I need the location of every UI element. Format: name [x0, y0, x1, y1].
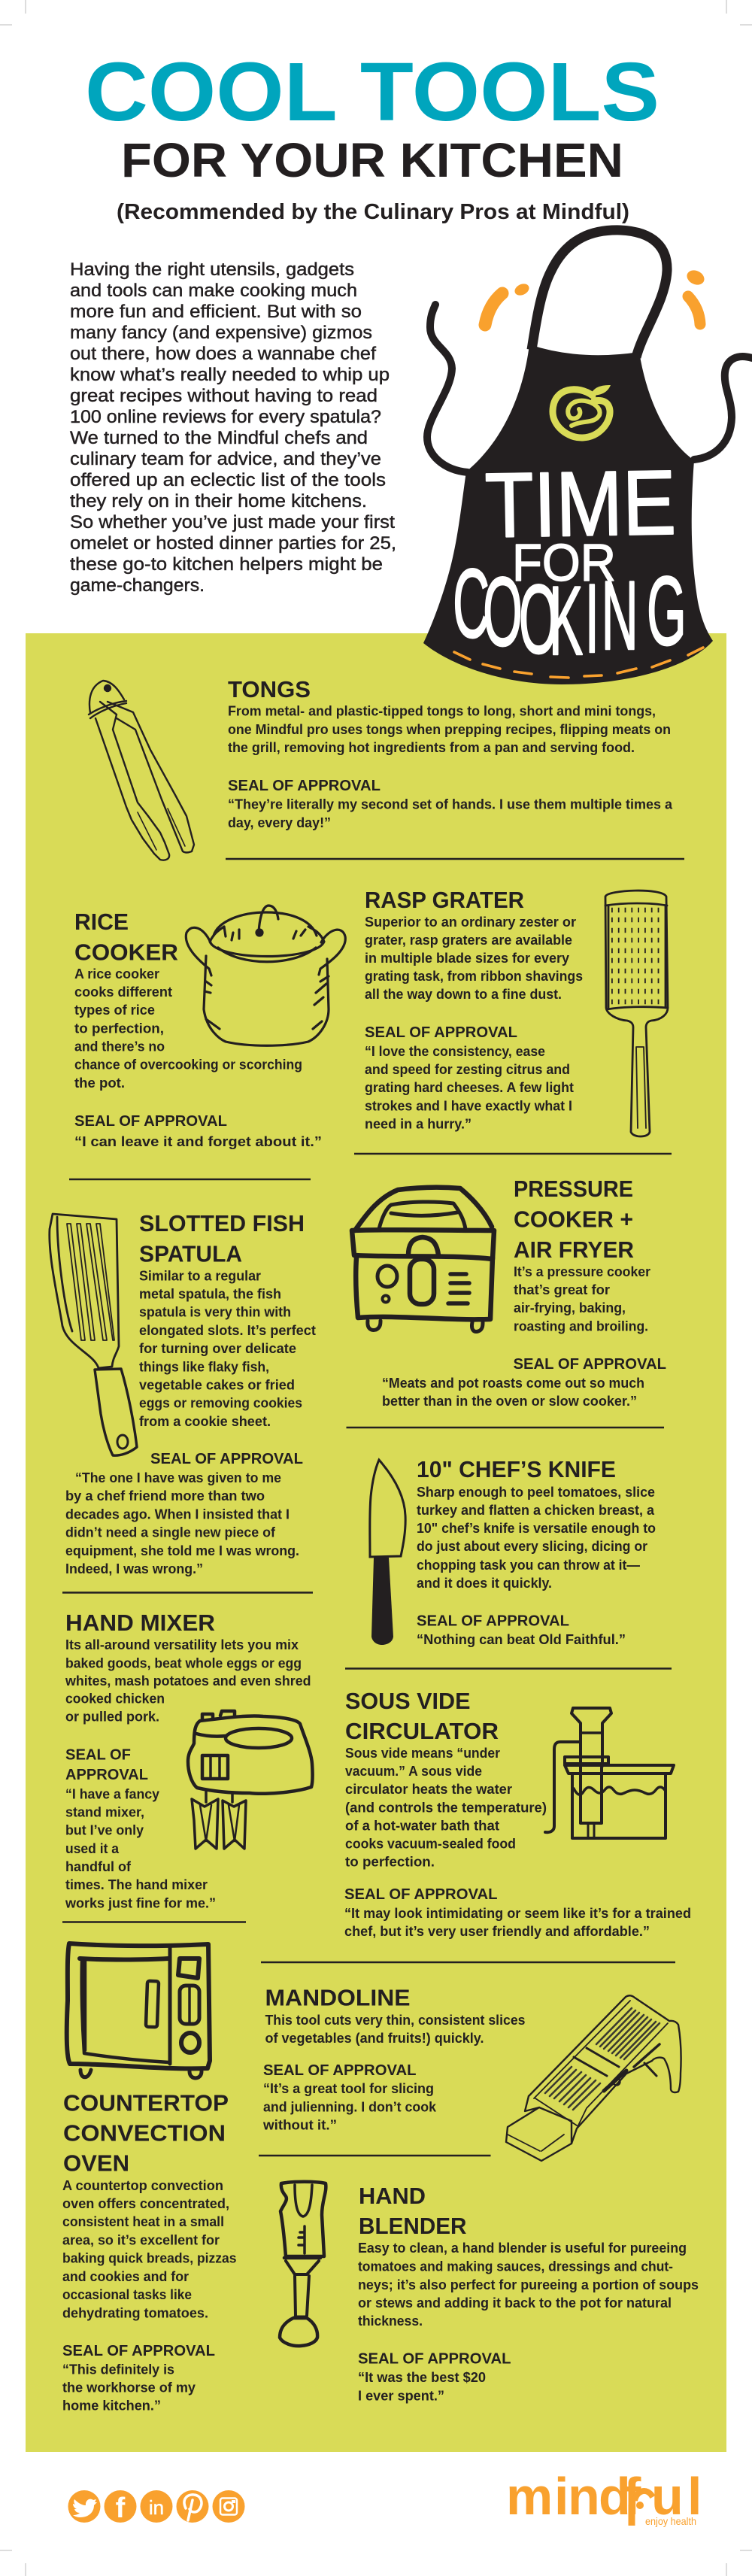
seal heading: SEAL OF: [65, 1746, 131, 1763]
description: chopping task you can throw at it—: [417, 1558, 640, 1573]
seal heading: APPROVAL: [65, 1766, 148, 1783]
intro paragraph: out there, how does a wannabe chef: [70, 344, 376, 364]
intro paragraph: more fun and efficient. But with so: [70, 302, 362, 322]
quote: [365, 1044, 574, 1131]
heading: PRESSURE: [514, 1176, 633, 1202]
quote: “I love the consistency, ease: [365, 1044, 545, 1059]
heading: HAND MIXER: [65, 1610, 215, 1636]
seal heading: SEAL OF APPROVAL: [513, 1355, 666, 1373]
heading: COOKER +: [514, 1206, 633, 1232]
description: spatula is very thin with: [139, 1304, 291, 1319]
quote: home kitchen.”: [62, 2398, 161, 2413]
quote: “They’re literally my second set of hands. I use them multiple times a: [228, 797, 673, 812]
description: baked goods, beat whole eggs or egg: [65, 1656, 302, 1671]
quote: “It may look intimidating or seem like it’s for a trained: [344, 1906, 691, 1921]
description: turkey and flatten a chicken breast, a: [417, 1503, 655, 1518]
description: the grill, removing hot ingredients from a pan and serving food.: [228, 740, 635, 755]
icon: hand blender: [280, 2182, 326, 2346]
quote: and speed for zesting citrus and: [365, 1062, 570, 1077]
icon: instagram: [212, 2490, 245, 2523]
description: [265, 2013, 525, 2046]
intro paragraph: [70, 260, 396, 596]
heading: BLENDER: [359, 2213, 466, 2239]
description: Its all-around versatility lets you mix: [65, 1637, 299, 1652]
quote: decades ago. When I insisted that I: [65, 1507, 290, 1522]
heading: 10" CHEF’S KNIFE: [417, 1456, 616, 1482]
intro paragraph: 100 online reviews for every spatula?: [70, 408, 381, 427]
intro paragraph: offered up an eclectic list of the tools: [70, 471, 386, 490]
quote: [382, 1376, 644, 1409]
seal heading: SEAL OF APPROVAL: [365, 1024, 517, 1041]
apron neck strap: [532, 230, 667, 357]
quote: used it a: [65, 1841, 120, 1856]
description: This tool cuts very thin, consistent slices: [265, 2013, 525, 2028]
intro paragraph: great recipes without having to read: [70, 387, 378, 406]
quote: without it.”: [262, 2118, 337, 2133]
seal heading: [65, 1746, 148, 1783]
quote: grating hard cheeses. A few light: [365, 1080, 574, 1095]
description: and it does it quickly.: [417, 1576, 552, 1591]
quote: but I’ve only: [65, 1823, 144, 1838]
seal heading: SEAL OF APPROVAL: [417, 1613, 569, 1629]
quote: equipment, she told me I was wrong.: [65, 1543, 299, 1558]
icon: convection oven: [67, 1943, 210, 2078]
heading: COUNTERTOP: [63, 2089, 229, 2116]
heading: TONGS: [228, 676, 311, 702]
description: cooked chicken: [65, 1691, 165, 1706]
quote: [358, 2370, 486, 2404]
quote: “Nothing can beat Old Faithful.”: [417, 1632, 626, 1647]
description: Sous vide means “under: [345, 1746, 500, 1761]
description: of a hot-water bath that: [345, 1819, 499, 1834]
intro paragraph: So whether you’ve just made your first: [70, 513, 395, 532]
section: countertop convection oven: [62, 1943, 236, 2413]
icon: tongs: [89, 681, 194, 860]
description: cooks different: [74, 985, 172, 1000]
heading: [345, 1688, 499, 1744]
quote: day, every day!”: [228, 815, 331, 830]
quote: [65, 1787, 216, 1910]
section: hand blender: [280, 2182, 699, 2404]
description: [417, 1485, 656, 1591]
heading: CIRCULATOR: [345, 1718, 499, 1744]
seal heading: SEAL OF APPROVAL: [150, 1450, 303, 1467]
description: area, so it’s excellent for: [62, 2232, 220, 2247]
description: tomatoes and making sauces, dressings and chut-: [358, 2259, 673, 2274]
description: dehydrating tomatoes.: [62, 2306, 208, 2321]
seal heading: SEAL OF APPROVAL: [62, 2342, 215, 2359]
description: chance of overcooking or scorching: [74, 1057, 302, 1073]
title: COOL TOOLS: [85, 46, 660, 138]
quote: works just fine for me.”: [65, 1895, 216, 1910]
description: and cookies and for: [62, 2269, 189, 2284]
description: [74, 966, 302, 1091]
quote: handful of: [65, 1859, 132, 1874]
section: mandoline: [262, 1984, 681, 2161]
section: sous vide circulator: [344, 1688, 691, 1939]
orange splashes: [485, 268, 707, 325]
apron body: [423, 344, 713, 684]
icon: sous vide circulator: [545, 1708, 674, 1838]
intro paragraph: they rely on in their home kitchens.: [70, 492, 367, 511]
description: types of rice: [74, 1003, 155, 1018]
icon: facebook: f: [116, 2493, 126, 2524]
description: vegetable cakes or fried: [139, 1378, 295, 1393]
description: consistent heat in a small: [62, 2214, 224, 2229]
description: It’s a pressure cooker: [514, 1264, 650, 1279]
icon: pinterest: [176, 2490, 209, 2523]
icon: mandoline: [506, 1995, 681, 2161]
description: baking quick breads, pizzas: [62, 2250, 236, 2265]
quote: “The one I have was given to me: [75, 1470, 281, 1485]
intro paragraph: know what’s really needed to whip up: [70, 366, 390, 385]
quote: chef, but it’s very user friendly and affordable.”: [344, 1924, 650, 1939]
description: neys; it’s also perfect for pureeing a portion of soups: [358, 2277, 699, 2292]
quote: need in a hurry.”: [365, 1116, 472, 1131]
heading: [514, 1176, 634, 1263]
quote: “Meats and pot roasts come out so much: [382, 1376, 644, 1391]
intro paragraph: and tools can make cooking much: [70, 281, 357, 301]
description: in multiple blade sizes for every: [365, 951, 569, 966]
description: the pot.: [74, 1076, 125, 1091]
icon: twitter: [68, 2490, 101, 2523]
icon: rasp grater: [605, 891, 668, 1136]
intro paragraph: many fancy (and expensive) gizmos: [70, 323, 372, 343]
description: thickness.: [358, 2314, 423, 2329]
apron text: cooking: COOKING: [453, 548, 687, 675]
description: [358, 2241, 699, 2329]
intro paragraph: omelet or hosted dinner parties for 25,: [70, 534, 396, 554]
description: whites, mash potatoes and even shred: [65, 1673, 311, 1689]
description: [365, 915, 583, 1002]
description: roasting and broiling.: [514, 1319, 648, 1334]
quote: by a chef friend more than two: [65, 1488, 265, 1503]
description: A rice cooker: [74, 966, 159, 982]
heading: CONVECTION: [63, 2119, 226, 2147]
quote: “I have a fancy: [65, 1787, 159, 1802]
mindful logo: mindful: [506, 2467, 702, 2526]
quote: Indeed, I was wrong.”: [65, 1561, 203, 1576]
heading: HAND: [359, 2183, 426, 2209]
description: [228, 704, 671, 755]
description: 10" chef’s knife is versatile enough to: [417, 1521, 656, 1536]
apron illustration: [423, 230, 752, 684]
heading: [74, 909, 178, 966]
intro paragraph: these go-to kitchen helpers might be: [70, 555, 383, 575]
description: occasional tasks like: [62, 2287, 192, 2302]
seal heading: SEAL OF APPROVAL: [358, 2350, 511, 2368]
icon: pressure cooker: [352, 1188, 494, 1331]
intro paragraph: game-changers.: [70, 576, 205, 596]
description: [345, 1746, 547, 1870]
quote: better than in the oven or slow cooker.”: [382, 1394, 637, 1409]
quote: “It was the best $20: [358, 2370, 486, 2385]
description: oven offers concentrated,: [62, 2196, 229, 2211]
icon: apple logo: [553, 385, 611, 438]
quote: stand mixer,: [65, 1805, 144, 1820]
description: A countertop convection: [62, 2178, 223, 2193]
description: Easy to clean, a hand blender is useful for pureeing: [358, 2241, 687, 2256]
seal heading: SEAL OF APPROVAL: [74, 1112, 227, 1130]
quote: [65, 1470, 299, 1576]
icon: rice cooker pot: [186, 906, 345, 1045]
apron text: time: TIME: [484, 451, 677, 557]
icon: hand mixer: [188, 1711, 313, 1849]
intro paragraph: We turned to the Mindful chefs and: [70, 429, 368, 448]
icon: linkedin: [140, 2490, 173, 2523]
quote: times. The hand mixer: [65, 1877, 208, 1892]
description: of vegetables (and fruits!) quickly.: [265, 2031, 484, 2046]
seal heading: SEAL OF APPROVAL: [263, 2062, 417, 2079]
description: Similar to a regular: [139, 1268, 261, 1283]
description: [139, 1268, 316, 1429]
description: Superior to an ordinary zester or: [365, 915, 576, 930]
description: elongated slots. It’s perfect: [139, 1323, 316, 1338]
quote: “It’s a great tool for slicing: [263, 2081, 434, 2096]
heading: RICE: [74, 909, 129, 935]
icon: facebook: [104, 2490, 137, 2524]
description: eggs or removing cookies: [139, 1396, 302, 1411]
description: do just about every slicing, dicing or: [417, 1539, 647, 1554]
heading: [139, 1210, 305, 1267]
quote: strokes and I have exactly what I: [365, 1098, 572, 1113]
description: from a cookie sheet.: [139, 1414, 271, 1429]
quote: didn’t need a single new piece of: [65, 1525, 276, 1540]
description: grater, rasp graters are available: [365, 933, 572, 948]
icon: linkedin: in: [149, 2496, 164, 2519]
description: to perfection.: [345, 1855, 435, 1870]
description: grating task, from ribbon shavings: [365, 969, 583, 984]
heading: SPATULA: [139, 1241, 242, 1267]
quote: “I can leave it and forget about it.”: [74, 1134, 322, 1149]
quote: the workhorse of my: [62, 2380, 196, 2395]
heading: COOKER: [74, 939, 178, 966]
apron stitching: [454, 648, 703, 678]
quote: [228, 797, 673, 830]
description: and there’s no: [74, 1039, 165, 1054]
description: [65, 1637, 311, 1724]
quote: [344, 1906, 691, 1939]
heading: MANDOLINE: [265, 1984, 411, 2011]
footer social icons: [68, 2490, 245, 2524]
description: (and controls the temperature): [345, 1801, 547, 1816]
quote: and julienning. I don’t cook: [263, 2100, 437, 2115]
heading: AIR FRYER: [514, 1236, 634, 1263]
description: to perfection,: [74, 1021, 164, 1036]
apron waist ties: [427, 305, 752, 472]
section: tongs: [89, 676, 673, 860]
icon: fish spatula: [50, 1214, 137, 1455]
quote: I ever spent.”: [358, 2389, 444, 2404]
intro paragraph: culinary team for advice, and they’ve: [70, 450, 381, 469]
apron text: for: FOR: [512, 533, 616, 592]
section: rice cooker: [74, 906, 345, 1149]
quote: [62, 2362, 196, 2413]
description: air-frying, baking,: [514, 1300, 626, 1315]
icon: chef's knife: [370, 1460, 405, 1645]
description: Sharp enough to peel tomatoes, slice: [417, 1485, 655, 1500]
description: metal spatula, the fish: [139, 1286, 281, 1301]
description: things like flaky fish,: [139, 1360, 269, 1375]
description: [514, 1264, 650, 1334]
heading: OVEN: [63, 2150, 129, 2177]
seal heading: SEAL OF APPROVAL: [228, 777, 381, 794]
intro paragraph: Having the right utensils, gadgets: [70, 260, 354, 280]
description: one Mindful pro uses tongs when prepping recipes, flipping meats on: [228, 722, 671, 737]
heading: [63, 2089, 229, 2177]
heading: SOUS VIDE: [345, 1688, 471, 1714]
description: all the way down to a fine dust.: [365, 987, 562, 1002]
section: pressure cooker and air fryer: [352, 1176, 666, 1409]
description: or pulled pork.: [65, 1709, 159, 1724]
quote: [262, 2081, 437, 2133]
description: or stews and adding it back to the pot for natural: [358, 2295, 672, 2311]
heading: [359, 2183, 466, 2239]
seal heading: SEAL OF APPROVAL: [344, 1886, 498, 1903]
section: chef's knife: [370, 1456, 656, 1647]
tagline: (Recommended by the Culinary Pros at Mindful): [117, 200, 629, 224]
description: vacuum.” A sous vide: [345, 1764, 482, 1779]
panel: green tools background: [26, 633, 726, 2452]
description: cooks vacuum-sealed food: [345, 1837, 516, 1852]
description: for turning over delicate: [139, 1341, 296, 1356]
description: From metal- and plastic-tipped tongs to long, short and mini tongs,: [228, 704, 656, 719]
description: circulator heats the water: [345, 1782, 512, 1797]
logo tagline: enjoy health: [645, 2515, 696, 2527]
section: slotted fish spatula: [50, 1210, 316, 1576]
description: [62, 2178, 236, 2321]
heading: SLOTTED FISH: [139, 1210, 305, 1236]
quote: “This definitely is: [62, 2362, 174, 2377]
description: that’s great for: [514, 1282, 610, 1297]
section: hand mixer: [65, 1610, 313, 1910]
section: rasp grater: [365, 887, 668, 1136]
heading: RASP GRATER: [365, 887, 524, 913]
subtitle: FOR YOUR KITCHEN: [121, 133, 623, 187]
